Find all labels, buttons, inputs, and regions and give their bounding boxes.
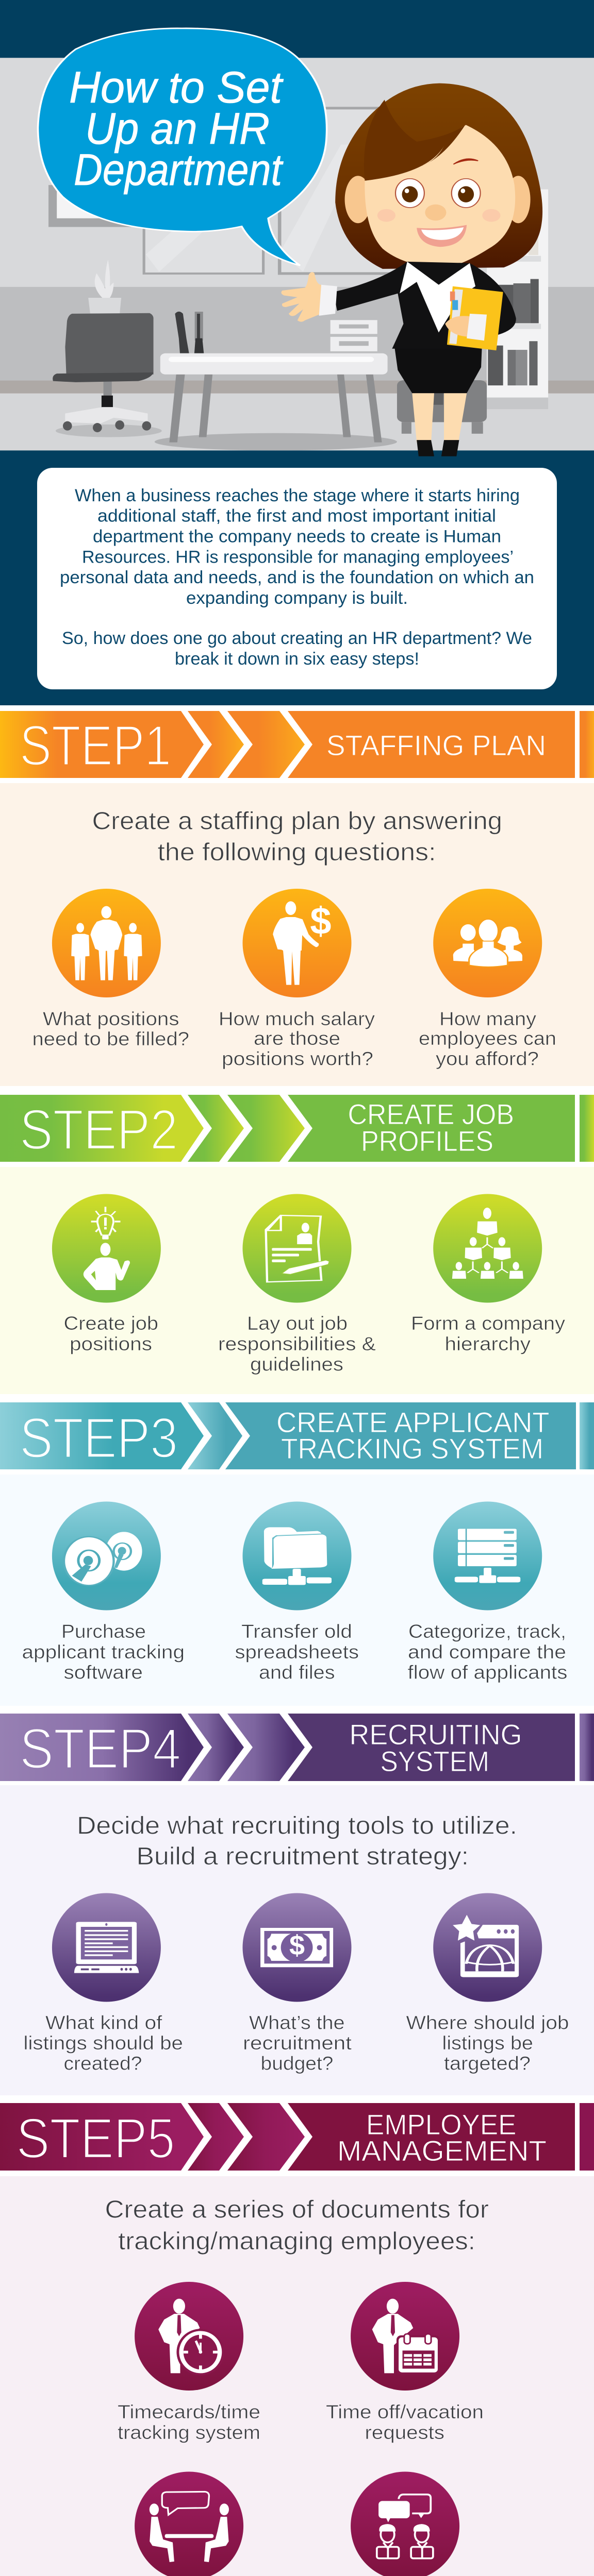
step 2 banner (0, 1095, 594, 1162)
labels (24, 2012, 569, 2074)
icon: company hierarchy (433, 1194, 542, 1302)
intro paragraph: personal data and needs, and is the foundation on which an (60, 568, 534, 587)
labels: What kind of (45, 2012, 162, 2033)
heading (92, 808, 502, 866)
icon: banknote budget (242, 1893, 352, 2002)
holding hand and cuff (445, 314, 487, 341)
icon: server stack (433, 1501, 542, 1611)
icon: starred web globe (433, 1893, 542, 2002)
heading: Build a recruitment strategy: (136, 1843, 469, 1870)
icon: banknote budget: $ (289, 1930, 305, 1961)
intro question: break it down in six easy steps! (175, 649, 419, 669)
labels: Purchase (61, 1621, 146, 1642)
cheeks (377, 209, 395, 222)
panel: step 1 staffing plan (0, 783, 594, 1086)
intro paragraph (60, 486, 534, 608)
intro card (37, 468, 557, 689)
labels: How many (439, 1008, 537, 1029)
pointing hand (281, 272, 321, 322)
labels: and compare the (408, 1641, 566, 1663)
wall (0, 58, 594, 287)
labels: budget? (261, 2053, 333, 2074)
icon: performance review meeting (135, 2472, 243, 2576)
document trays (331, 320, 377, 351)
labels: Categorize, track, (408, 1621, 566, 1642)
labels: need to be filled? (32, 1028, 189, 1049)
labels: Transfer old (241, 1621, 352, 1642)
shoes (417, 440, 434, 456)
icon: resume document and pen (242, 1194, 352, 1302)
step title: CREATE APPLICANT (276, 1406, 550, 1438)
lower wall (0, 287, 594, 381)
icon: software discs (52, 1501, 161, 1611)
labels: Where should job (406, 2012, 569, 2033)
heading (77, 1812, 517, 1870)
icon: shared folder (242, 1501, 352, 1611)
icon: man with clock (135, 2282, 243, 2391)
panel: step 2 job profiles (0, 1167, 594, 1394)
jacket (334, 262, 516, 349)
step title (276, 1406, 550, 1465)
hero: office scene with speech bubble (0, 0, 594, 705)
panel: step 4 recruiting system (0, 1785, 594, 2095)
step title: EMPLOYEE (366, 2108, 517, 2141)
intro paragraph: When a business reaches the stage where it starts hiring (75, 486, 520, 505)
step 3 banner (0, 1402, 594, 1470)
nose (425, 205, 446, 221)
title: How to Set (69, 63, 284, 112)
title: Up an HR (85, 104, 270, 154)
labels: top row: Time off/vacation (326, 2401, 484, 2422)
intro question: So, how does one go about creating an HR department? We (62, 629, 532, 648)
cuff (319, 285, 337, 316)
intro paragraph: expanding company is built. (186, 588, 408, 608)
office illustration (0, 28, 594, 456)
labels: and files (259, 1662, 335, 1683)
step title: SYSTEM (381, 1745, 489, 1777)
labels: top row (118, 2401, 484, 2443)
labels: What’s the (249, 2012, 344, 2033)
icon: employee group (433, 889, 542, 997)
icon: man with calendar (351, 2282, 459, 2391)
labels: top row: requests (365, 2422, 444, 2443)
labels: listings should be (24, 2032, 183, 2054)
labels (32, 1008, 556, 1070)
labels: targeted? (444, 2053, 531, 2074)
stool (397, 380, 487, 434)
step 4 banner (0, 1714, 594, 1781)
labels: Lay out job (247, 1313, 348, 1334)
navy header band (0, 0, 594, 58)
icon: laptop listing (52, 1893, 161, 2002)
navy band below scene (0, 450, 594, 705)
panel: step 5 employee management (0, 2176, 594, 2576)
hair (335, 83, 542, 269)
labels: applicant tracking (22, 1641, 185, 1663)
labels: you afford? (436, 1048, 539, 1070)
legs (412, 393, 434, 443)
step title (337, 2108, 547, 2167)
step 5 banner (0, 2103, 594, 2171)
step number: STEP5 (16, 2107, 175, 2170)
intro paragraph: Resources. HR is responsible for managing employees’ (82, 547, 514, 567)
face (365, 125, 515, 268)
heading (105, 2196, 489, 2255)
labels: spreadsheets (235, 1641, 359, 1663)
heading: Create a staffing plan by answering (92, 808, 502, 835)
step title: STAFFING PLAN (326, 729, 546, 761)
labels: positions worth? (222, 1048, 373, 1070)
desk (155, 353, 397, 450)
step title: CREATE JOB (348, 1098, 514, 1130)
labels: are those (254, 1028, 340, 1049)
heading: the following questions: (158, 839, 436, 866)
shirt collar (400, 262, 475, 332)
title: Department (74, 145, 284, 195)
step title: PROFILES (361, 1125, 493, 1157)
step number: STEP3 (20, 1406, 178, 1470)
woman (281, 83, 542, 456)
labels: positions (70, 1333, 152, 1354)
labels (22, 1621, 567, 1683)
plant (88, 260, 121, 313)
labels: responsibilities & (218, 1333, 376, 1354)
floor (0, 394, 594, 450)
fringe (364, 100, 465, 181)
labels (64, 1313, 566, 1375)
panel: step 3 applicant tracking (0, 1475, 594, 1706)
step title (348, 1098, 514, 1157)
step number: STEP1 (20, 714, 171, 777)
icon: three staff members (52, 889, 161, 997)
folder (447, 286, 503, 350)
icon: man with dollar sign: $ (310, 900, 332, 942)
intro paragraph: additional staff, the first and most important initial (97, 506, 496, 526)
labels: What positions (43, 1008, 179, 1029)
icon: idea bulb over person (52, 1194, 161, 1302)
labels: Form a company (411, 1313, 566, 1334)
eyebrow (453, 159, 478, 164)
labels: Create job (64, 1313, 158, 1334)
labels: recruitment (243, 2032, 352, 2054)
heading: Create a series of documents for (105, 2196, 489, 2224)
labels: flow of applicants (407, 1662, 567, 1683)
step title: RECRUITING (350, 1718, 522, 1751)
ears (345, 176, 371, 223)
speech bubble (38, 28, 327, 265)
labels: top row: tracking system (118, 2422, 260, 2443)
labels: software (64, 1662, 143, 1683)
intro paragraph: department the company needs to create is Human (93, 527, 501, 546)
labels: created? (64, 2053, 142, 2074)
heading: Decide what recruiting tools to utilize. (77, 1812, 517, 1839)
labels: listings be (442, 2032, 533, 2054)
step title: TRACKING SYSTEM (281, 1432, 543, 1465)
labels: top row: Timecards/time (118, 2401, 260, 2422)
eyes (395, 179, 424, 208)
skirt (395, 348, 482, 393)
picture frames (48, 108, 405, 274)
step number: STEP4 (20, 1717, 181, 1781)
step title: MANAGEMENT (337, 2134, 547, 2167)
step 1 banner (0, 711, 594, 778)
heading: tracking/managing employees: (118, 2228, 475, 2255)
icon: employee communication (351, 2472, 459, 2576)
mouth (417, 225, 467, 247)
title (69, 63, 284, 195)
step title (350, 1718, 522, 1777)
labels: guidelines (250, 1354, 343, 1375)
chair (53, 313, 162, 437)
bookshelf (487, 190, 548, 409)
intro question (62, 629, 532, 669)
icon: man with dollar sign (242, 889, 352, 997)
labels: employees can (419, 1028, 556, 1049)
step number: STEP2 (20, 1098, 178, 1161)
pens (175, 312, 204, 353)
labels: How much salary (219, 1008, 375, 1029)
labels: hierarchy (444, 1333, 531, 1354)
baseboard (0, 381, 594, 394)
